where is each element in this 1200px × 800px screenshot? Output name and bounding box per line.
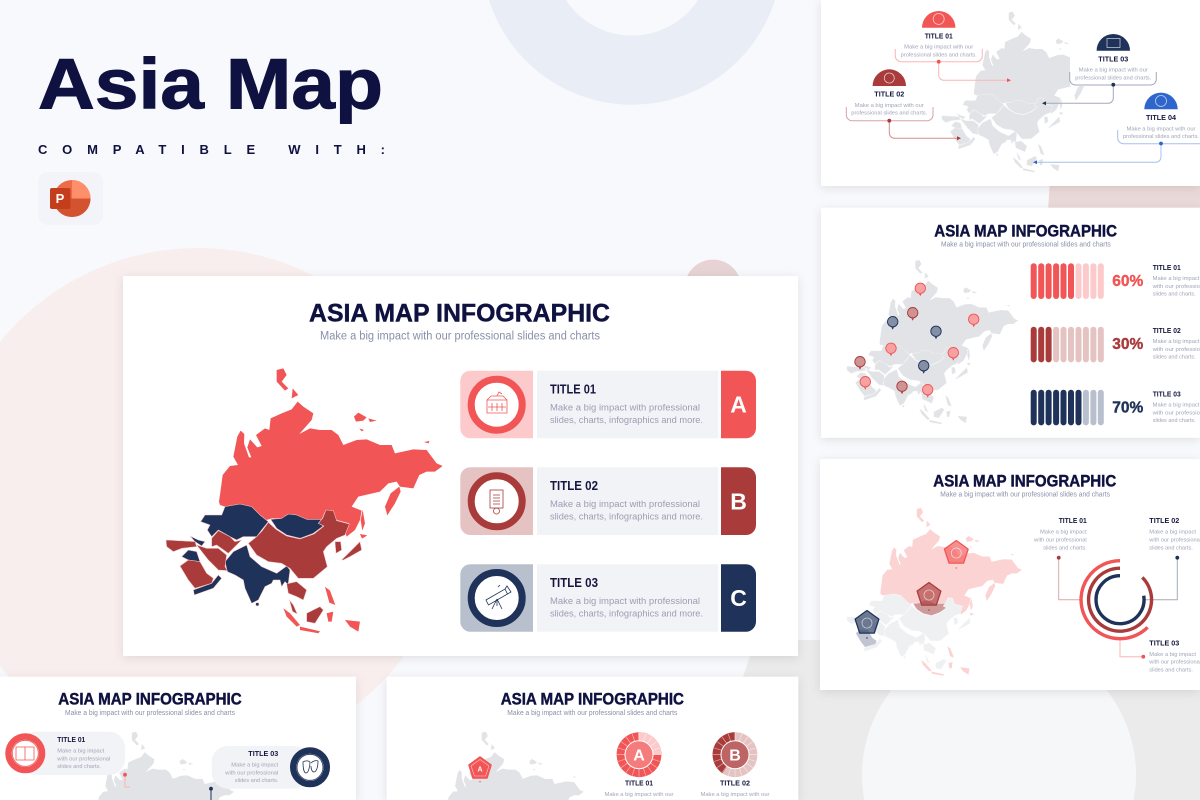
slide title: ASIA MAP INFOGRAPHIC — [934, 222, 1117, 241]
callout 03 — [1042, 30, 1200, 105]
stat 30%: slides and charts. — [1153, 355, 1196, 361]
callout 02: professional slides and charts. — [851, 111, 928, 117]
map: highlighted Asia — [847, 508, 1022, 676]
card B: Make a big impact with professional — [550, 499, 700, 510]
callout 03: professional slides and charts. — [1075, 75, 1152, 81]
card: title 03 — [209, 746, 327, 800]
slide subtitle: Make a big impact with our professional slides and charts — [941, 242, 1111, 249]
card A: Make a big impact with professional — [550, 402, 700, 414]
stat 60%: with our professio — [1152, 284, 1200, 290]
text: title 03: TITLE 03 — [1149, 638, 1179, 647]
stat 70%: TITLE 03 — [1153, 389, 1181, 398]
callout 01: Make a big impact with our — [904, 45, 973, 51]
stat 30%: Make a big impact — [1153, 339, 1200, 345]
text: title 02: TITLE 02 — [1149, 516, 1179, 525]
card: title 01: Make a big impact — [57, 749, 105, 755]
stat 70%: Make a big impact — [1153, 402, 1200, 408]
icon: PowerPoint — [38, 172, 103, 225]
callout 02: TITLE 02 — [874, 90, 904, 99]
card C: Make a big impact with professional — [550, 596, 700, 607]
panel: top-right slide with callouts — [821, 0, 1200, 186]
slide title: ASIA MAP INFOGRAPHIC — [58, 690, 242, 709]
card B: TITLE 02 — [550, 478, 598, 493]
bars: 70% — [1031, 390, 1104, 425]
card: title 01: TITLE 01 — [57, 735, 85, 744]
callout 01: professional slides and charts. — [901, 52, 977, 58]
card: title 01 — [8, 732, 130, 787]
donut B: B — [729, 748, 741, 764]
map: grey Asia — [847, 260, 1018, 424]
marker: pentagon A: A — [477, 766, 483, 774]
icon: telescope — [471, 572, 522, 624]
callout 03: TITLE 03 — [1098, 54, 1128, 63]
slide title: ASIA MAP INFOGRAPHIC — [309, 300, 610, 328]
card B: slides, charts, infographics and more. — [550, 512, 703, 523]
card A: slides, charts, infographics and more. — [550, 415, 703, 426]
stat 30%: with our professio — [1152, 347, 1200, 353]
callout 04: Make a big impact with our — [1126, 126, 1196, 132]
map pins — [854, 283, 979, 398]
icon: PowerPoint: P — [56, 191, 65, 206]
donut A — [617, 733, 661, 777]
text: title 02: Make a big impact — [1149, 530, 1196, 536]
donut A label: Make a big impact with our — [604, 792, 674, 798]
stat 60% — [1112, 263, 1200, 298]
card B: B — [730, 488, 747, 514]
callout 02: Make a big impact with our — [855, 103, 924, 109]
card A — [460, 371, 756, 438]
map: grey Asia — [942, 12, 1109, 172]
card C: C — [730, 585, 747, 611]
stat 60%: TITLE 01 — [1153, 263, 1181, 272]
card B — [460, 467, 756, 535]
icon: building — [471, 379, 522, 430]
panel: bottom-middle slide — [387, 677, 798, 800]
slide subtitle: Make a big impact with our professional slides and charts — [507, 710, 678, 717]
marker: pentagon dark red — [917, 582, 941, 611]
card C — [460, 564, 756, 632]
callout 03: Make a big impact with our — [1079, 68, 1148, 74]
callout 02 — [846, 68, 961, 140]
map: colored Asia — [166, 368, 443, 633]
card: title 01: slides and charts. — [57, 764, 101, 770]
card C: slides, charts, infographics and more. — [550, 609, 703, 620]
card: title 03: Make a big impact — [231, 763, 279, 769]
card: title 03: with our professional — [224, 770, 278, 776]
text: title 03: Make a big impact — [1149, 652, 1196, 658]
marker: pentagon A — [469, 757, 491, 782]
stat 30%: 30% — [1112, 336, 1143, 353]
stat 70%: slides and charts. — [1153, 418, 1196, 424]
donut A: A — [633, 748, 645, 764]
donut A label — [604, 778, 674, 798]
donut B — [710, 729, 760, 780]
text: title 02: slides and charts. — [1149, 545, 1193, 551]
callout 01: TITLE 01 — [925, 31, 953, 40]
stat 30%: TITLE 02 — [1153, 326, 1181, 335]
slide subtitle: Make a big impact with our professional slides and charts — [940, 492, 1110, 499]
main title: Asia Map — [38, 45, 383, 124]
subtitle: compatible with: COMPATIBLE WITH: — [38, 142, 385, 157]
ring chart — [1081, 561, 1152, 639]
callout 04 — [1033, 93, 1200, 164]
slide title: ASIA MAP INFOGRAPHIC — [933, 472, 1116, 491]
text: title 02 — [1148, 516, 1200, 551]
panel: main slide — [123, 276, 798, 656]
stat 60%: 60% — [1112, 273, 1143, 290]
callout 01 — [895, 8, 1011, 82]
stat 60%: Make a big impact — [1153, 276, 1200, 282]
panel: bottom-left slide — [0, 677, 356, 800]
icon: certificate — [471, 476, 522, 527]
donut B label: TITLE 02 — [720, 778, 750, 787]
slide title: ASIA MAP INFOGRAPHIC — [501, 690, 684, 709]
stat 70%: with our professio — [1152, 410, 1200, 416]
marker: pentagon navy — [855, 610, 879, 639]
dots — [1057, 556, 1179, 659]
panel: pentagon markers and rings slide — [820, 459, 1200, 690]
text: title 01 — [1033, 516, 1087, 551]
connector lines — [1059, 558, 1177, 657]
text: title 03: with our professiona — [1148, 660, 1200, 666]
marker: pentagon red — [944, 540, 968, 569]
slide subtitle: Make a big impact with our professional slides and charts — [320, 331, 600, 343]
text: title 01: with our professional — [1033, 538, 1087, 544]
bars: 30% — [1031, 327, 1104, 362]
card A: A — [730, 392, 747, 418]
text: title 01: slides and charts. — [1043, 545, 1087, 551]
stat 60%: slides and charts. — [1153, 292, 1196, 298]
stat 70%: 70% — [1112, 399, 1143, 416]
donut B label — [700, 778, 770, 798]
bars: 60% — [1031, 263, 1104, 299]
donut B label: Make a big impact with our — [700, 792, 770, 798]
text: title 03 — [1148, 638, 1200, 674]
donut A label: TITLE 01 — [625, 778, 653, 787]
slide subtitle: Make a big impact with our professional slides and charts — [65, 710, 235, 717]
panel: pins and percentage bars slide — [821, 208, 1200, 438]
map: grey Asia — [448, 732, 584, 800]
stat 30% — [1112, 326, 1200, 361]
card C: TITLE 03 — [550, 575, 598, 590]
card: title 01: with our professional — [56, 756, 110, 762]
stat 70% — [1112, 389, 1200, 424]
text: title 01: TITLE 01 — [1059, 516, 1087, 525]
card A: TITLE 01 — [550, 381, 596, 396]
callout 04: TITLE 04 — [1146, 113, 1177, 122]
card: title 03: slides and charts. — [235, 778, 279, 784]
map: grey Asia — [98, 732, 234, 800]
text: title 03: slides and charts. — [1149, 668, 1193, 674]
callout 04: professional slides and charts. — [1123, 134, 1199, 140]
card: title 03: TITLE 03 — [248, 749, 278, 758]
text: title 01: Make a big impact — [1040, 530, 1087, 536]
text: title 02: with our professiona — [1148, 538, 1200, 544]
